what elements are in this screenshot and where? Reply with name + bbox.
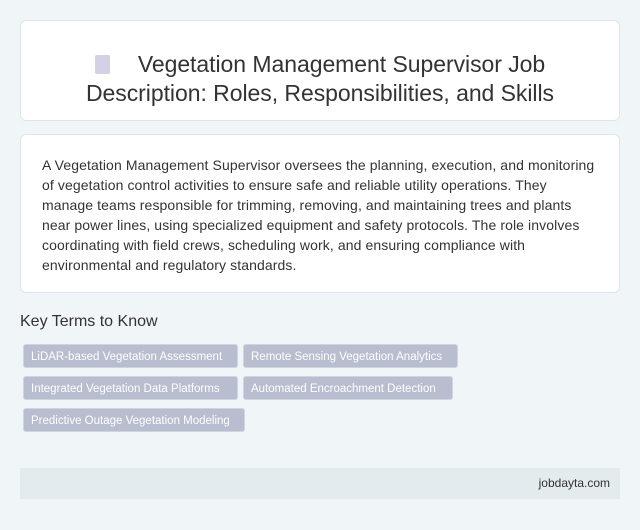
title	[86, 51, 554, 106]
tag 2	[243, 344, 458, 368]
footer	[20, 468, 620, 499]
icon: document	[95, 55, 110, 74]
tag 1: LiDAR-based Vegetation Assessment	[31, 351, 222, 363]
footer text: jobdayta.com	[539, 476, 610, 490]
description text: environmental and regulatory standards.	[42, 257, 296, 273]
description text	[42, 157, 594, 273]
title: Vegetation Management Supervisor Job	[138, 51, 545, 77]
description text: near power lines, using specialized equipment and safety protocols. The role involves	[42, 217, 579, 233]
description text: A Vegetation Management Supervisor oversees the planning, execution, and monitoring	[42, 157, 594, 173]
description text: of vegetation control activities to ensure safe and reliable utility operations. They	[42, 177, 547, 193]
description text: manage teams responsible for trimming, removing, and maintaining trees and plants	[42, 197, 571, 213]
description text: coordinating with field crews, scheduling work, and ensuring compliance with	[42, 237, 525, 253]
tag 4: Automated Encroachment Detection	[251, 383, 436, 395]
heading: key terms: Key Terms to Know	[20, 313, 158, 330]
tag 5	[23, 408, 245, 432]
description card	[20, 134, 620, 293]
tag 2: Remote Sensing Vegetation Analytics	[251, 351, 442, 363]
tag 4	[243, 376, 453, 400]
header card	[20, 20, 620, 121]
title: Description: Roles, Responsibilities, and Skills	[86, 80, 554, 106]
tag 3	[23, 376, 238, 400]
tag 5: Predictive Outage Vegetation Modeling	[31, 415, 230, 427]
tag 1	[23, 344, 238, 368]
tag 3: Integrated Vegetation Data Platforms	[31, 383, 220, 395]
